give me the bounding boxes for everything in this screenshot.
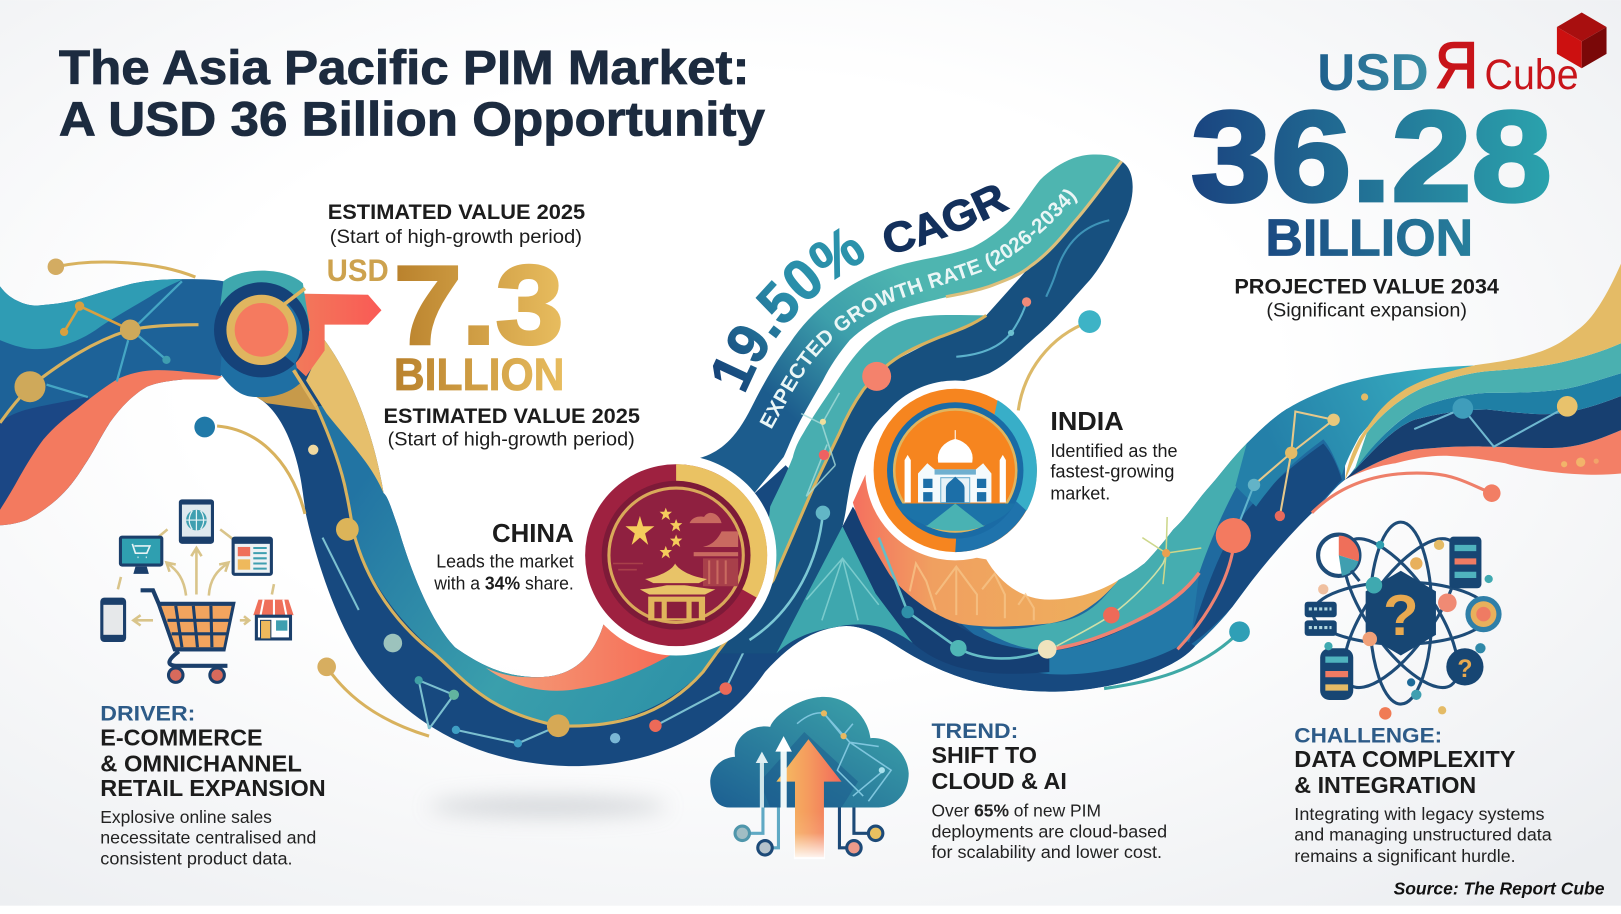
trend text: for scalability and lower cost. [931, 842, 1162, 862]
challenge text: DATA COMPLEXITY [1294, 746, 1516, 772]
driver text: Explosive online sales [100, 807, 272, 827]
lower right ribbon [750, 264, 1621, 692]
stripe: gold [1345, 264, 1621, 480]
challenge text: & INTEGRATION [1294, 772, 1476, 798]
text ribbon [682, 155, 1122, 495]
driver text: & OMNICHANNEL [100, 750, 302, 776]
source note: Source: The Report Cube [1394, 878, 1605, 898]
challenge text: remains a significant hurdle. [1294, 846, 1516, 866]
india emblem [865, 380, 1045, 560]
icon: data complexity atom: ? [1457, 656, 1472, 683]
navy back band [716, 161, 1133, 653]
india text [1050, 408, 1177, 503]
navy diagonal strip [1188, 444, 1342, 646]
value 2025 top caption: ESTIMATED VALUE 2025 [328, 201, 585, 224]
value 2025 lower caption: (Start of high-growth period) [388, 430, 635, 451]
trend text: Over 65% of new PIM [931, 801, 1101, 821]
icon: cloud with arrow [710, 697, 909, 859]
logo [1317, 12, 1607, 103]
main S-band [194, 340, 843, 766]
india text: market. [1050, 483, 1110, 503]
trend text: CLOUD & AI [931, 768, 1067, 794]
value 2025 figure: USD [327, 253, 389, 288]
textured blue upper [1235, 365, 1487, 507]
projected value figure: 36.28 [1191, 86, 1552, 229]
challenge text: and managing unstructured data [1294, 825, 1552, 845]
india text: fastest-growing [1050, 462, 1174, 482]
logo: USD [1317, 43, 1429, 101]
projected value figure: BILLION [1265, 208, 1473, 266]
trend text [931, 718, 1167, 862]
icon: data complexity atom: ? [1383, 584, 1418, 648]
teal upper band [982, 444, 1254, 650]
driver text: E-COMMERCE [100, 724, 263, 750]
china text [433, 520, 574, 593]
logo: Я [1435, 29, 1478, 103]
driver text [100, 701, 326, 868]
challenge text: Integrating with legacy systems [1294, 804, 1545, 824]
projected value caption: (Significant expansion) [1266, 300, 1467, 321]
ribbon base [833, 405, 1345, 692]
value 2025 top caption [328, 201, 585, 248]
stripe: coral end [1345, 430, 1621, 480]
teal triangle [776, 526, 913, 653]
CAGR ribbon [700, 154, 1133, 654]
title [59, 41, 765, 146]
orange skyline band [853, 470, 1119, 627]
logo: Cube [1485, 51, 1579, 98]
driver text: RETAIL EXPANSION [100, 775, 326, 801]
title: A USD 36 Billion Opportunity [59, 92, 765, 146]
value 2025 figure: 7.3 [394, 242, 563, 367]
icon: red cube [1557, 12, 1607, 68]
path: subheading [771, 195, 1078, 430]
trend text: TREND: [931, 718, 1018, 743]
cagr subheading: EXPECTED GROWTH RATE (2026-2034) [760, 189, 1078, 429]
arrow: coral pointer [279, 294, 381, 376]
china emblem [576, 455, 776, 655]
path: cagr 2 [887, 208, 1010, 254]
cagr word: CAGR [884, 185, 1010, 252]
title: The Asia Pacific PIM Market: [59, 41, 750, 95]
driver text: DRIVER: [100, 701, 195, 726]
value 2025 lower caption [384, 405, 640, 451]
challenge text: CHALLENGE: [1294, 722, 1442, 747]
navy arc bottom [833, 526, 1195, 692]
challenge text [1294, 722, 1552, 866]
second teal strip [763, 315, 986, 580]
projected value caption: PROJECTED VALUE 2034 [1234, 276, 1499, 299]
cagr figure: 19.50% [712, 228, 864, 392]
icon: data complexity atom [1305, 522, 1499, 720]
india text: Identified as the [1050, 441, 1177, 461]
driver text: consistent product data. [100, 848, 293, 868]
navy band around india [843, 507, 1049, 674]
stripe: blue [1349, 373, 1621, 476]
left ribbon [0, 259, 258, 525]
stripe: navy [1345, 396, 1621, 480]
china text: Leads the market [436, 552, 574, 572]
path: cagr 1 [744, 255, 874, 395]
value 2025 figure [327, 242, 564, 400]
projected value caption [1234, 276, 1499, 321]
value 2025 figure: BILLION [394, 349, 564, 400]
india connector [1018, 310, 1101, 410]
value 2025 lower caption: ESTIMATED VALUE 2025 [384, 405, 640, 428]
value 2025 top caption: (Start of high-growth period) [330, 227, 582, 248]
driver text: necessitate centralised and [100, 828, 316, 848]
stripe: teal [1354, 343, 1621, 470]
trend text: deployments are cloud-based [931, 821, 1167, 841]
china text: with a 34% share. [433, 573, 574, 593]
start ring [214, 271, 316, 406]
india text: INDIA [1050, 408, 1124, 436]
icon: shopping cart [100, 499, 294, 682]
trend text: SHIFT TO [931, 742, 1037, 768]
china text: CHINA [492, 520, 574, 548]
